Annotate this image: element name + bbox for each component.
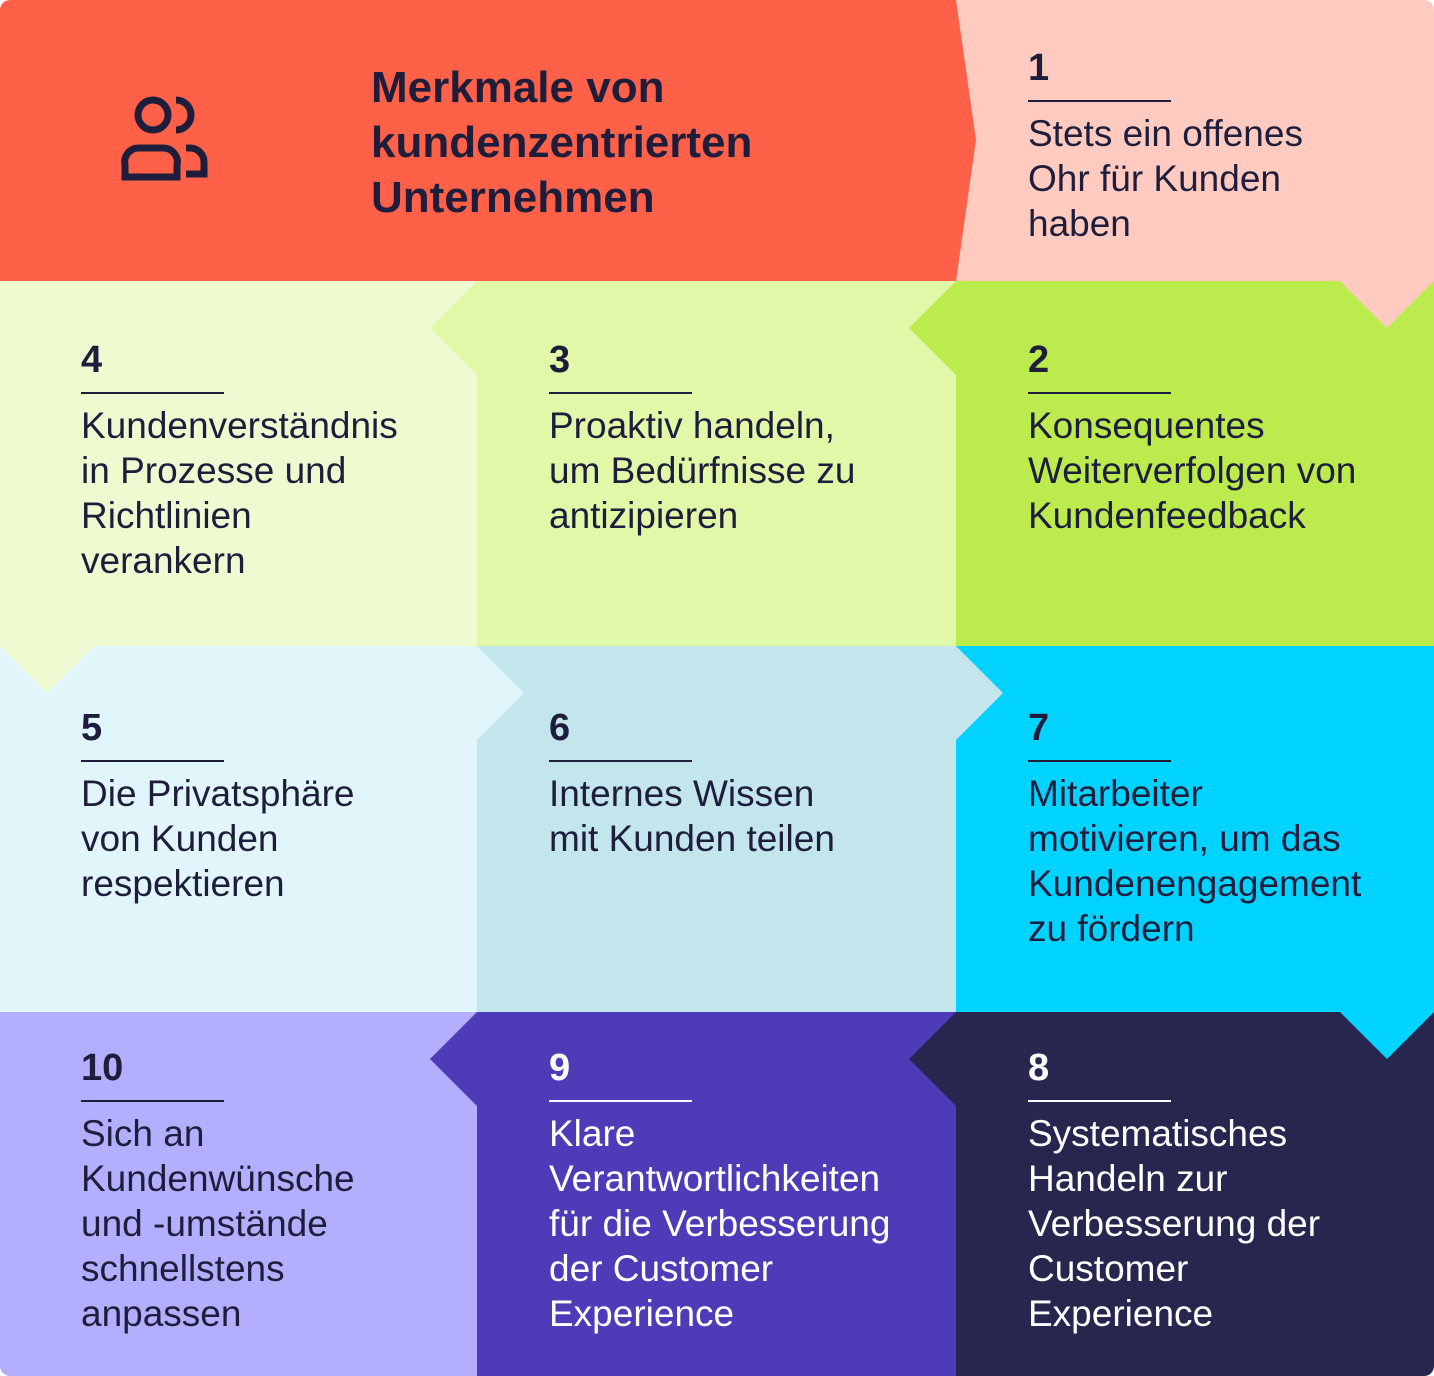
panel: 7: Kundenengagement bbox=[1028, 863, 1362, 904]
panel: 1 bbox=[956, 0, 1434, 281]
panel: 1: 1 bbox=[1028, 47, 1049, 89]
panel: 9: 9 bbox=[549, 1047, 570, 1089]
panel: 2: Kundenfeedback bbox=[1028, 495, 1306, 536]
panel: 6: mit Kunden teilen bbox=[549, 818, 835, 859]
panel: 2 bbox=[909, 281, 1434, 646]
panel: 10: anpassen bbox=[81, 1293, 241, 1334]
panel: 9: für die Verbesserung bbox=[549, 1203, 890, 1244]
panel: 3: 3 bbox=[549, 339, 570, 381]
panel: 5: von Kunden bbox=[81, 818, 279, 859]
title: kundenzentrierten bbox=[371, 118, 752, 167]
panel: 4 bbox=[0, 281, 477, 646]
panel: 3: Proaktiv handeln, bbox=[549, 405, 835, 446]
icon: people bbox=[125, 100, 204, 177]
panel: 4: 4 bbox=[81, 339, 102, 381]
panel: 4: Kundenverständnis bbox=[81, 405, 398, 446]
panel: 9: Experience bbox=[549, 1293, 734, 1334]
panel: 5: respektieren bbox=[81, 863, 285, 904]
panel: 7: 7 bbox=[1028, 707, 1049, 749]
panel: header bbox=[0, 0, 956, 281]
panel: 1: Stets ein offenes bbox=[1028, 113, 1303, 154]
panel: 9: der Customer bbox=[549, 1248, 773, 1289]
panel: 6: Internes Wissen bbox=[549, 773, 814, 814]
panel: 10: Sich an bbox=[81, 1113, 204, 1154]
panel: 8: 8 bbox=[1028, 1047, 1049, 1089]
panel: 8 bbox=[909, 1012, 1434, 1376]
panel: 2: Weiterverfolgen von bbox=[1028, 450, 1356, 491]
panel: 8: Systematisches bbox=[1028, 1113, 1287, 1154]
panel: 10: und -umstände bbox=[81, 1203, 328, 1244]
panel: 9 bbox=[430, 1012, 956, 1376]
panel: 8: Handeln zur bbox=[1028, 1158, 1228, 1199]
panel: 1: haben bbox=[1028, 203, 1131, 244]
panel: 6 bbox=[477, 646, 956, 1012]
panel: 8: Experience bbox=[1028, 1293, 1213, 1334]
panel: 2: Konsequentes bbox=[1028, 405, 1265, 446]
panel: 8: Verbesserung der bbox=[1028, 1203, 1320, 1244]
panel: 2: 2 bbox=[1028, 339, 1049, 381]
panel: 5: Die Privatsphäre bbox=[81, 773, 355, 814]
panel: 10 bbox=[0, 1012, 477, 1376]
panel: 4: in Prozesse und bbox=[81, 450, 346, 491]
panel: 8: Customer bbox=[1028, 1248, 1188, 1289]
panel: 7: motivieren, um das bbox=[1028, 818, 1341, 859]
panel: 7 bbox=[956, 646, 1434, 1012]
panel: 9: Verantwortlichkeiten bbox=[549, 1158, 880, 1199]
panel: 5: 5 bbox=[81, 707, 102, 749]
panel: 3: antizipieren bbox=[549, 495, 738, 536]
panel: 3: um Bedürfnisse zu bbox=[549, 450, 855, 491]
title: Unternehmen bbox=[371, 173, 655, 222]
panel: 7: Mitarbeiter bbox=[1028, 773, 1203, 814]
panel: 6: 6 bbox=[549, 707, 570, 749]
panel: 4: verankern bbox=[81, 540, 246, 581]
panel: 3 bbox=[430, 281, 956, 646]
title: Merkmale von bbox=[371, 63, 664, 112]
panel: 7: zu fördern bbox=[1028, 908, 1195, 949]
panel: 4: Richtlinien bbox=[81, 495, 252, 536]
panel: 9: Klare bbox=[549, 1113, 635, 1154]
panel: 1: Ohr für Kunden bbox=[1028, 158, 1281, 199]
panel: 10: schnellstens bbox=[81, 1248, 285, 1289]
panel: 10: Kundenwünsche bbox=[81, 1158, 355, 1199]
panel: 5 bbox=[0, 646, 477, 1012]
panel: 10: 10 bbox=[81, 1047, 123, 1089]
